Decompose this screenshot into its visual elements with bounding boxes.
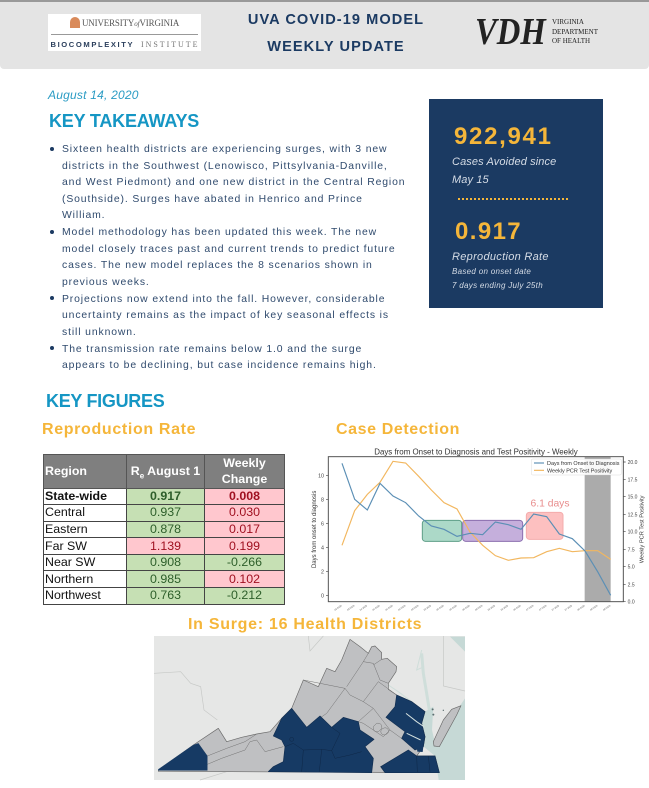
table: reproduction rate by region: Northwest [45,588,101,602]
text block: key takeaways bullets: Sixteen health districts are experiencing surges, with 3 new [62,144,387,155]
table: reproduction rate by region: 0.937 [150,505,181,519]
right axis: 7.5 [628,547,635,553]
navy peninsula [417,747,423,752]
chart title: Days from Onset to Diagnosis and Test Positivity - Weekly [374,448,578,457]
logo: University of Virginia Biocomplexity Institute [48,14,201,51]
title line 1: UVA COVID-19 MODEL [248,12,424,28]
navy: southern Virginia [268,708,374,773]
x axis dates: 04-2020 [398,605,407,612]
text block: key takeaways bullets: still unknown. [62,327,137,338]
left axis: 10 [318,473,324,479]
VDH name: VIRGINIA DEPARTMENT OF HEALTH [552,18,598,45]
legend: Days from Onset to Diagnosis [547,461,620,467]
right axis: 10.0 [628,530,638,536]
x axis dates [334,605,612,612]
panel: headline stats [429,99,603,308]
small navy city [290,737,294,741]
table: reproduction rate by region: Near SW [45,555,95,569]
navy: southeast [381,750,439,773]
text block: key takeaways bullets: previous weeks. [62,277,150,288]
water islands [432,708,434,710]
x axis dates: 06-2020 [513,605,522,612]
left axis: 0 [321,593,324,599]
navy: far southwest [158,743,207,770]
x axis dates: 06-2020 [501,605,509,612]
right axis: 17.5 [628,477,638,483]
heading: case detection: Case Detection [336,421,460,438]
chart: days from onset to diagnosis and test positivity [312,448,645,612]
right axis: 0.0 [628,600,635,606]
x axis dates: 04-2020 [360,605,368,612]
table: reproduction rate by region: Eastern [45,522,88,536]
table: reproduction rate by region: -0.266 [227,555,262,569]
Potomac river [388,650,424,702]
x axis dates: 03-2020 [347,605,356,612]
table: reproduction rate by region [43,454,285,605]
Chesapeake upper bay [422,653,429,710]
text block: key takeaways bullets: William. [62,210,105,221]
x axis dates: 07-2020 [565,605,573,612]
right axis: 5.0 [628,565,635,571]
plot frame [328,457,623,602]
stat note: Based on onset date [452,267,531,276]
left axis: 4 [321,545,324,551]
heading: key figures: KEY FIGURES [46,391,164,411]
basemap borders [154,636,465,780]
callout: 6.1 days: 6.1 days [530,499,570,510]
text block: key takeaways bullets: model closely traces past and current trends to predict future [62,244,396,255]
map: Virginia health districts in surge [154,636,465,780]
x axis dates: 05-2020 [449,605,458,612]
left axis: 8 [321,497,324,503]
right axis: 15.0 [628,495,638,501]
title [248,12,424,54]
x axis dates: 05-2020 [411,605,420,612]
logo wordmark: UNIVERSITYofVIRGINIA [82,18,179,28]
stat label: cases avoided: May 15 [452,174,489,186]
text block: key takeaways bullets: (Southside). Surges have abated in Henrico and Prince [62,194,363,205]
period box: green [422,520,462,541]
x axis dates: 05-2020 [424,605,432,612]
period box: purple [463,520,523,541]
x axis dates: 04-2020 [372,605,381,612]
gray eastern shore [433,706,461,747]
x axis dates: 03-2020 [334,605,343,612]
table: reproduction rate by region: Weekly [223,456,266,470]
right axis label: Weekly PCR Test Positivity [639,495,645,563]
heading: reproduction rate: Reproduction Rate [42,421,196,438]
icon: rotunda [70,17,80,28]
logo subline: BIOCOMPLEXITY [50,40,134,49]
left axis: 6 [321,521,324,527]
text block: key takeaways bullets: Model methodology has been updated this week. The new [62,227,377,238]
dotted divider [458,198,568,200]
table: reproduction rate by region: 0.908 [150,555,181,569]
x axis dates: 08-2020 [590,605,599,612]
basemap land [154,636,465,780]
stat label: reproduction rate: Reproduction Rate [452,251,549,263]
text block: key takeaways bullets: The transmission rate remains below 1.0 and the surge [62,344,362,355]
table: reproduction rate by region: 0.199 [229,539,260,553]
period box: red [526,512,563,539]
district borders [198,653,408,764]
right axis: 12.5 [628,512,638,518]
text block: key takeaways bullets: appears to be declining, but case incidence remains high. [62,360,377,371]
stat: reproduction rate: 0.917 [455,218,522,245]
table: reproduction rate by region: 0.917 [150,489,181,503]
table: reproduction rate by region: 0.017 [229,522,260,536]
header band [0,0,649,69]
x axis dates: 05-2020 [436,605,445,612]
x axis dates: 07-2020 [552,605,560,612]
logo: Virginia Department of Health [475,11,598,53]
table: reproduction rate by region: -0.212 [227,588,262,602]
text block: key takeaways bullets: uncertainty remains as the impact of key seasonal effects is [62,310,389,321]
basemap water [422,637,465,780]
logo subline 2: INSTITUTE [141,40,199,49]
legend: Weekly PCR Test Positivity [547,468,613,474]
heading: key takeaways: KEY TAKEAWAYS [49,111,199,131]
line: test positivity [342,461,611,560]
right axis: 20.0 [628,460,638,466]
x axis dates: 04-2020 [385,605,394,612]
table: reproduction rate by region: 1.139 [150,539,181,553]
right axis [623,460,638,606]
table: reproduction rate by region: 0.763 [150,588,181,602]
right axis: 2.5 [628,582,635,588]
line: days from onset to diagnosis [342,463,611,595]
forecast band [585,457,611,602]
title line 2: WEEKLY UPDATE [267,38,405,54]
table: reproduction rate by region: 0.878 [150,522,181,536]
stat label: cases avoided [452,156,556,186]
x axis dates: 06-2020 [488,605,496,612]
table: reproduction rate by region: 0.030 [229,505,260,519]
table: reproduction rate by region: Change [222,472,267,486]
left axis [318,473,328,599]
x axis dates: 06-2020 [475,605,484,612]
gray districts [158,639,439,773]
text block: key takeaways bullets: cases. The new model replaces the 8 scenarios shown in [62,260,373,271]
x axis dates: 08-2020 [577,605,586,612]
logo divider [51,34,198,35]
table: reproduction rate by region: Central [45,505,85,519]
table: reproduction rate by region: Region [45,464,87,478]
small city districts [373,723,389,735]
text block: key takeaways bullets: districts in the Southwest (Lenowisco, Pittsylvania-Danville, [62,161,388,172]
navy: northern neck [386,695,425,750]
date: August 14, 2020 [48,88,139,102]
x axis dates: 07-2020 [539,605,548,612]
left axis: 2 [321,569,324,575]
table: reproduction rate by region: Far SW [45,539,87,553]
table: reproduction rate by region: 0.008 [229,489,260,503]
stat label: cases avoided: Cases Avoided since [452,156,556,168]
legend [531,459,621,475]
table: reproduction rate by region: Re August 1 [131,464,200,481]
table: reproduction rate by region: 0.985 [150,572,181,586]
VDH letters: VDH [475,11,546,53]
stat: cases avoided: 922,941 [454,123,553,150]
stat note [452,267,543,290]
table: reproduction rate by region: State-wide [45,489,107,503]
text block: key takeaways bullets: and West Piedmont) and one new district in the Central Region [62,177,405,188]
x axis dates: 08-2020 [603,605,612,612]
table: reproduction rate by region: Northern [45,572,93,586]
heading: in surge: In Surge: 16 Health Districts [188,616,422,633]
text block: key takeaways bullets: Projections now extend into the fall. However, considerable [62,294,385,305]
text block: key takeaways bullets [50,144,405,371]
stat note: 7 days ending July 25th [452,280,543,290]
rivers and inner borders [406,713,424,740]
table: reproduction rate by region: 0.102 [229,572,260,586]
x axis dates: 06-2020 [462,605,471,612]
left axis label: Days from onset to diagnosis [312,491,318,568]
x axis dates: 07-2020 [526,605,535,612]
